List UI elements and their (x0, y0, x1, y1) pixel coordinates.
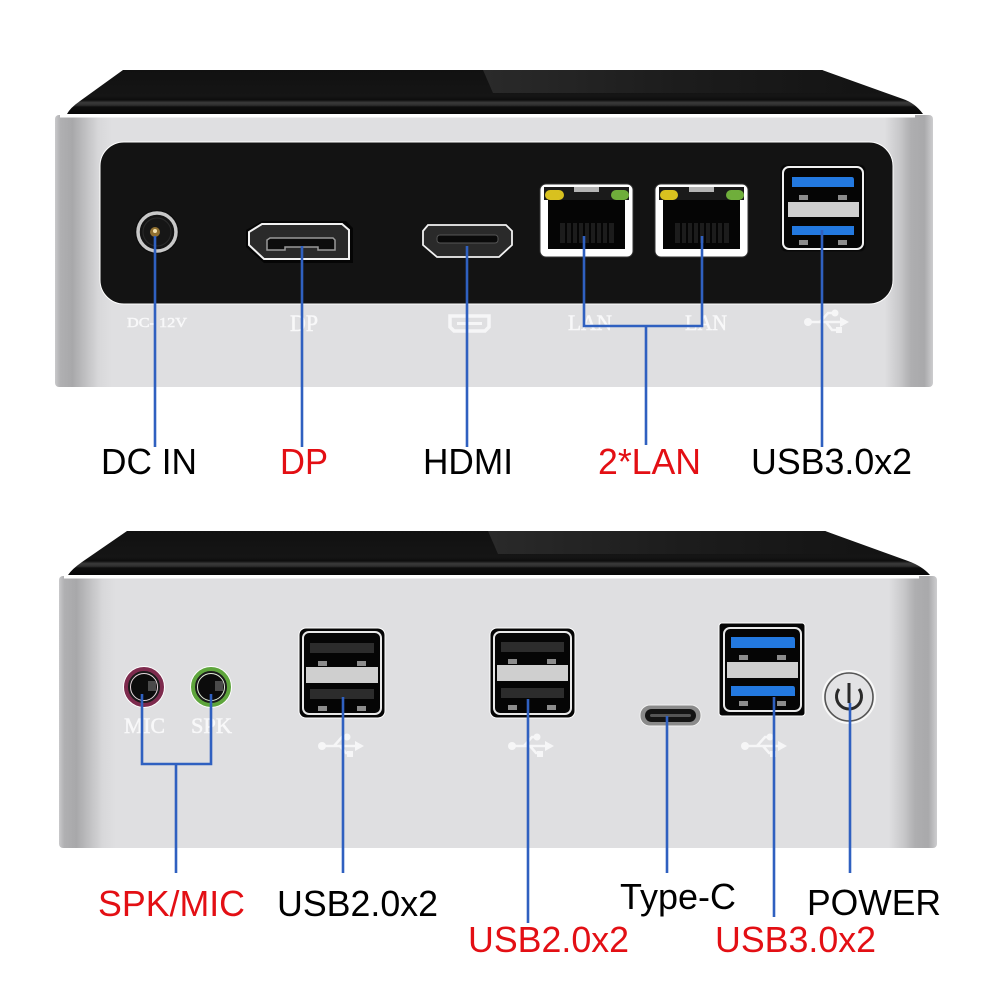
callout lines, front view (142, 694, 850, 923)
label: USB2.0x2 black: USB2.0x2 (277, 883, 438, 924)
label: DC IN: DC IN (101, 441, 197, 482)
port: USB 2.0 pair A (299, 628, 385, 718)
label: USB3.0x2 red: USB3.0x2 (715, 919, 876, 960)
device: front panel view (59, 531, 937, 923)
label: DP: DP (280, 441, 328, 482)
printed label DP: DP (290, 311, 318, 336)
port: USB 2.0 pair B (490, 628, 575, 718)
port: LAN 1 (540, 184, 633, 257)
printed label LAN right: LAN (685, 310, 727, 335)
printed label SPK: SPK (191, 713, 232, 738)
port: DisplayPort (246, 221, 353, 263)
port: USB 3.0 pair (781, 165, 865, 251)
button: power (823, 671, 875, 723)
black port panel (100, 142, 893, 304)
label: Type-C: Type-C (620, 876, 736, 917)
port: USB 3.0 pair (719, 623, 805, 716)
port: SPK jack (190, 666, 232, 708)
label: HDMI: HDMI (423, 441, 513, 482)
printed USB icon 1 (318, 734, 364, 757)
device: back panel view (55, 70, 933, 447)
label: 2*LAN: 2*LAN (598, 441, 701, 482)
port: MIC jack (123, 666, 165, 708)
printed label HDMI icon (450, 316, 489, 331)
port: DC jack (135, 210, 179, 254)
metal body (55, 115, 933, 387)
label: USB2.0x2 red: USB2.0x2 (468, 919, 629, 960)
callout lines, back view (155, 230, 822, 447)
metal body (59, 576, 937, 848)
port: Type-C (640, 705, 701, 726)
printed USB icon 2 (508, 734, 554, 757)
label: POWER: POWER (807, 882, 941, 923)
lid top (67, 70, 923, 114)
printed label DC-12V: DC- 12V (127, 316, 187, 331)
printed USB icon 3 (741, 734, 787, 757)
label: USB3.0x2 top: USB3.0x2 (751, 441, 912, 482)
lid top (68, 531, 930, 575)
port: HDMI (423, 225, 512, 257)
printed label MIC: MIC (124, 713, 165, 738)
printed USB icon (804, 310, 849, 333)
port: LAN 2 (655, 184, 748, 257)
label: SPK/MIC: SPK/MIC (98, 883, 245, 924)
printed label LAN left: LAN (568, 310, 612, 335)
